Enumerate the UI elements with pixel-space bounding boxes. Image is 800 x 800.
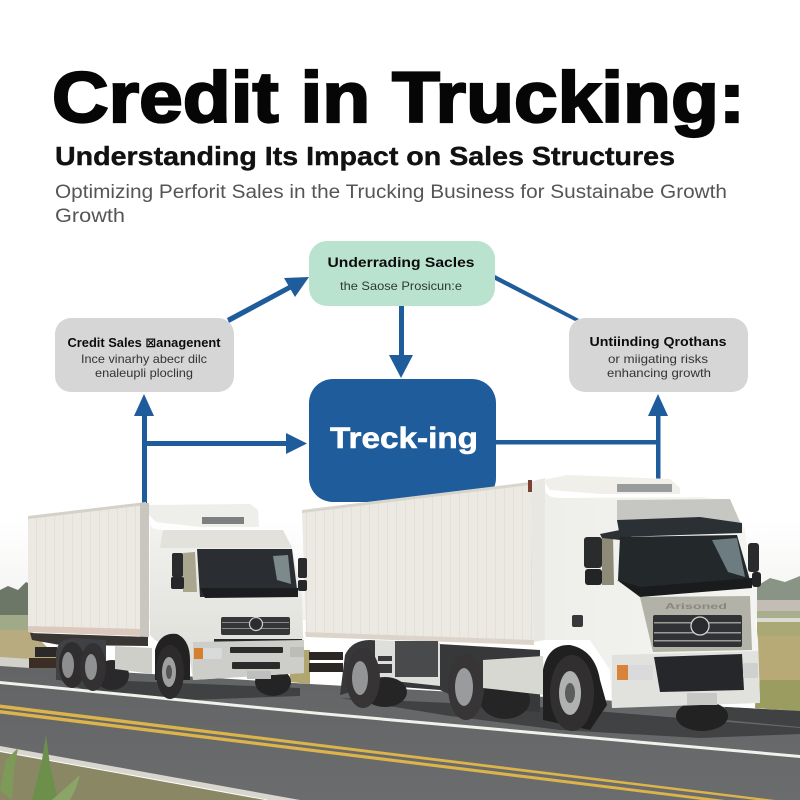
cargo box [28,502,149,646]
credit sales heading: Credit Sales ⊠anagenent [68,335,221,350]
grille panel and emblem: Arisoned [665,602,727,611]
road [0,657,800,800]
panel: credit sales [55,318,234,392]
yellow double line [0,704,775,800]
far front wheel [676,701,728,731]
growth text: or miigating risks [608,352,708,366]
tagline: Growth [55,206,125,227]
tagline: Optimizing Perforit Sales in the Trucking Business for Sustainabe Growth [55,182,727,203]
horizon sky band [0,520,800,620]
white lane line [0,681,800,758]
lower white edge line [0,746,300,800]
growth heading: Untiinding Qrothans [590,334,726,349]
truck: right [302,475,761,731]
front wheel [155,634,190,699]
far front wheel [255,668,291,696]
growth text: enhancing growth [607,366,711,380]
grille panel and emblem [640,596,752,652]
side window and mirror [171,552,307,592]
fuel tank [483,656,545,695]
cab body [545,490,760,708]
connector: top box to right box [495,275,579,321]
truck shadows on road [55,678,800,738]
roadside grass [0,735,265,800]
top box text: the Saose Prosicun:e [340,279,462,293]
credit sales text: Ince vinarhy abecr dilc [81,352,207,366]
cargo box [302,478,545,672]
side window and mirror [584,526,761,587]
cab body [150,524,304,680]
wind deflector [543,475,680,494]
background landscape [0,576,800,711]
wind deflector [149,504,259,527]
arrow: top box to central box [389,306,413,378]
panel: top box [309,241,495,306]
credit sales text: enaleupli plocling [95,366,193,380]
door handle [572,615,583,627]
connector and arrow: central box to right box [496,394,668,480]
fuel tanks [115,646,152,674]
grille and emblem [214,617,302,642]
front wheel [543,645,607,731]
truck: left [28,502,307,699]
rear axle and side panel [340,640,540,720]
rear axle [29,638,129,691]
panel: central box [309,379,496,502]
bumper and lights [612,651,760,708]
central box label: Treck-ing [330,422,478,455]
arrow: left riser to credit sales box [134,394,154,504]
windshield and visor [617,517,752,597]
growth text [607,352,711,380]
top box heading: Underrading Sacles [328,254,475,270]
panel: growth [569,318,748,392]
windshield [197,549,298,598]
tagline [55,182,727,227]
credit sales text [81,352,207,380]
subtitle: Understanding Its Impact on Sales Structures [55,141,675,171]
arrow: credit sales to top box [227,277,309,323]
title: Credit in Trucking: [52,59,745,138]
arrow: left riser to central box [146,433,307,454]
bumper [193,640,304,680]
